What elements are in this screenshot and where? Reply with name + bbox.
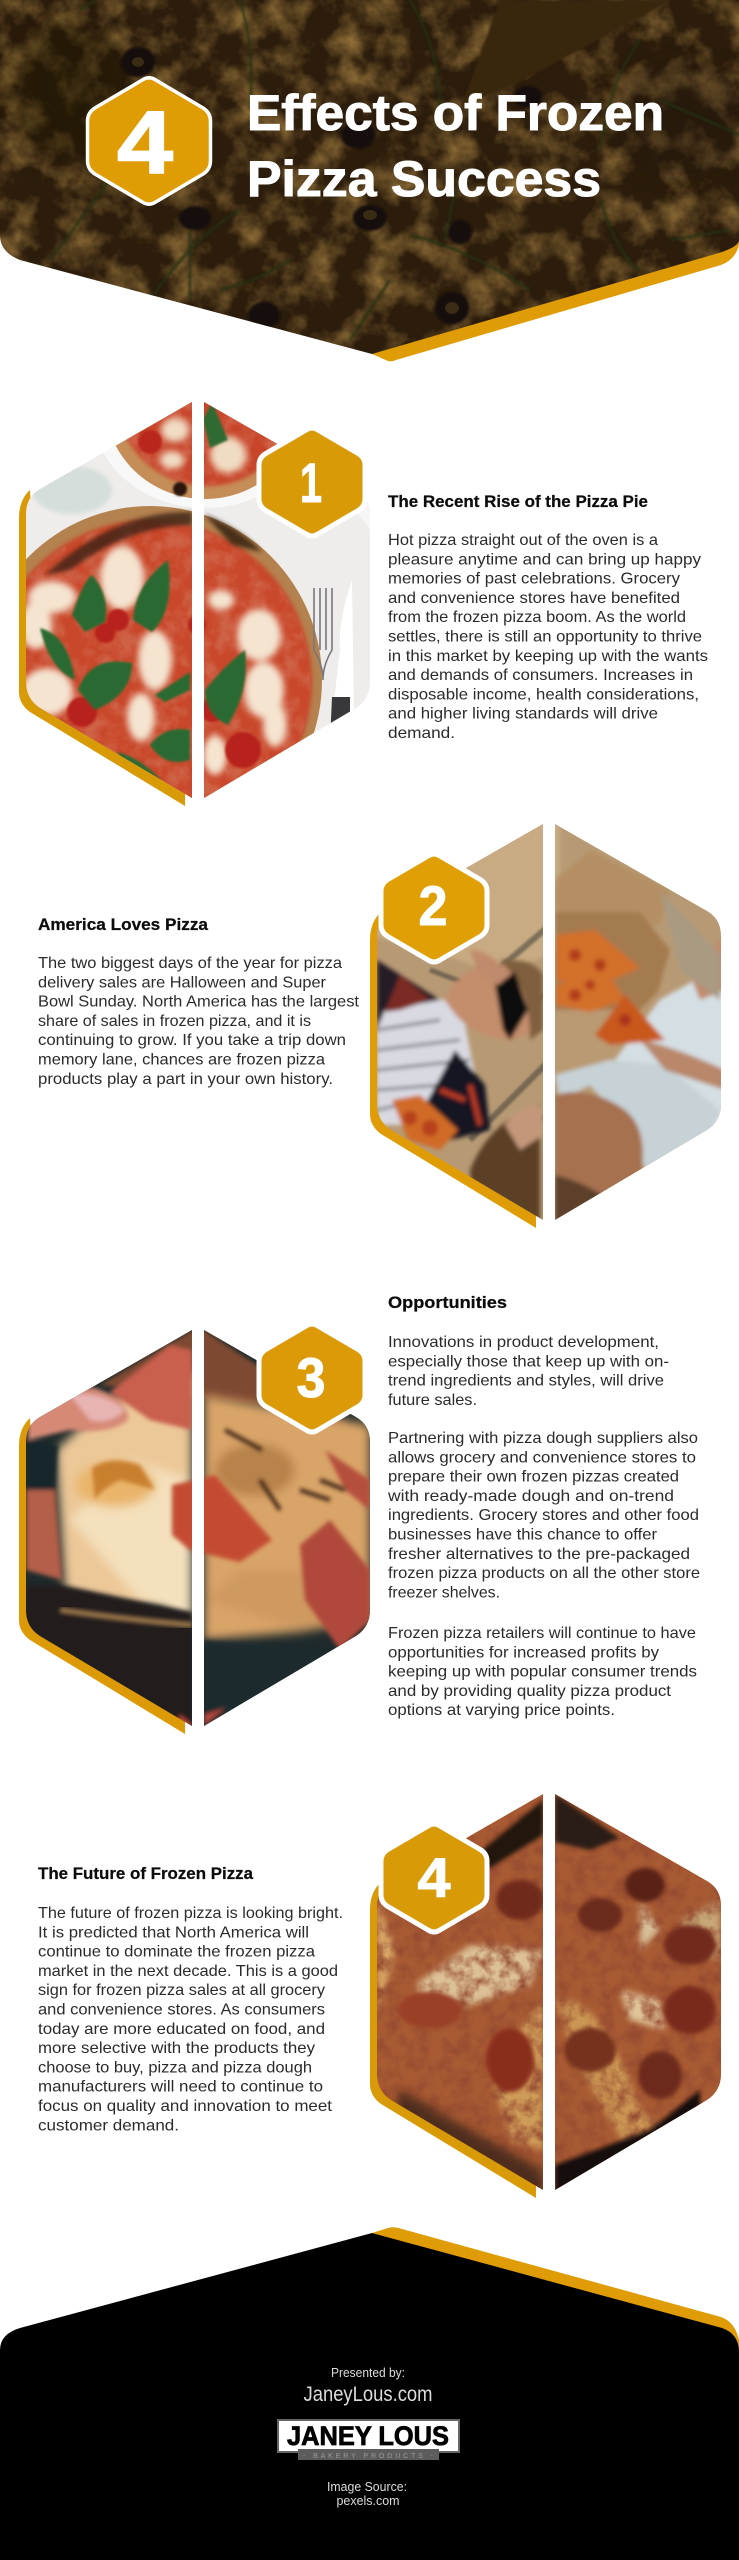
footer orange accent — [372, 2227, 739, 2360]
section 4 body: today are more educated on food, and — [38, 2021, 325, 2038]
section 3 body: Frozen pizza retailers will continue to have — [388, 1625, 696, 1642]
footer — [0, 2227, 739, 2560]
section 3 body: prepare their own frozen pizzas created — [388, 1469, 679, 1486]
section 2 heading: America Loves Pizza — [38, 915, 209, 934]
section 4 body: focus on quality and innovation to meet — [38, 2098, 333, 2115]
logo: Janey Lous Bakery Products: JANEY LOUS — [287, 2421, 449, 2451]
section 3 body: keeping up with popular consumer trends — [388, 1664, 697, 1681]
section 3 body: businesses have this chance to offer — [388, 1526, 658, 1544]
section 4 body: continue to dominate the frozen pizza — [38, 1944, 315, 1961]
section 3 body: future sales. — [388, 1392, 477, 1409]
logo: Janey Lous Bakery Products: - BAKERY PRODUCTS - — [303, 2453, 434, 2460]
image source — [327, 2479, 407, 2508]
section 1 body — [388, 532, 708, 742]
section 1 body: and higher living standards will drive — [388, 706, 658, 723]
section 1 — [19, 402, 708, 806]
section 1 body: Hot pizza straight out of the oven is a — [388, 532, 658, 549]
section 3 body: trend ingredients and styles, will drive — [388, 1373, 664, 1390]
section 4 body: The future of frozen pizza is looking bright. — [38, 1905, 343, 1922]
section 2 body: products play a part in your own history. — [38, 1071, 333, 1088]
section 1 body: pleasure anytime and can bring up happy — [388, 551, 701, 568]
section 3 body: fresher alternatives to the pre-packaged — [388, 1546, 690, 1563]
header number badge: 4 — [117, 92, 174, 192]
section 4 body: sign for frozen pizza sales at all grocery — [38, 1982, 325, 1999]
image source: Image Source: — [327, 2479, 407, 2494]
section 3 body: Partnering with pizza dough suppliers also — [388, 1430, 698, 1447]
section 2 body: continuing to grow. If you take a trip down — [38, 1032, 346, 1049]
section 4 body: It is predicted that North America will — [38, 1924, 309, 1941]
section 3 body: with ready-made dough and on-trend — [387, 1488, 674, 1505]
section 3 body: ingredients. Grocery stores and other food — [388, 1507, 699, 1524]
section 1 number badge — [259, 428, 365, 536]
section 2 body: share of sales in frozen pizza, and it is — [38, 1013, 311, 1030]
section 2 body: Bowl Sunday. North America has the largest — [38, 994, 360, 1011]
section 3 number badge — [259, 1324, 365, 1432]
section 3 body: freezer shelves. — [388, 1584, 500, 1601]
section 4 body: more selective with the products they — [38, 2040, 315, 2057]
section 1 body: settles, there is still an opportunity to thrive — [388, 628, 702, 646]
section 2 number badge: 2 — [418, 874, 448, 937]
section 1 body: memories of past celebrations. Grocery — [388, 571, 680, 588]
section 4 number badge: 4 — [418, 1846, 450, 1909]
section 3 body: and by providing quality pizza product — [388, 1683, 672, 1700]
section 1 number badge: 1 — [300, 451, 322, 514]
section 2 orange accent — [370, 912, 536, 1228]
section 2 photo: couple with pizza on a blanket — [370, 820, 730, 1230]
section 2 body: The two biggest days of the year for pizza — [38, 955, 342, 972]
section 3 — [19, 1293, 700, 1735]
section 3 photo: hand holding a pizza slice — [20, 1325, 380, 1735]
section 4 body: and convenience stores. As consumers — [38, 2002, 325, 2018]
section 2 body: delivery sales are Halloween and Super — [38, 974, 327, 991]
title — [247, 85, 664, 207]
section 2 number badge — [381, 854, 487, 962]
section 4 photo: pepperoni pizza close-up — [370, 1790, 730, 2200]
section 3 body: allows grocery and convenience stores to — [388, 1449, 696, 1466]
section 2 body: memory lane, chances are frozen pizza — [38, 1052, 325, 1068]
section 4 body — [38, 1905, 343, 2134]
section 3 body — [387, 1334, 700, 1719]
header number badge — [88, 78, 210, 204]
section 1 body: disposable income, health considerations, — [388, 686, 699, 703]
image source: pexels.com — [336, 2493, 400, 2508]
section 3 orange accent — [19, 1418, 185, 1734]
section 1 heading: The Recent Rise of the Pizza Pie — [388, 492, 648, 511]
section 4 heading: The Future of Frozen Pizza — [38, 1864, 254, 1883]
section 1 body: from the frozen pizza boom. As the world — [388, 609, 686, 626]
section 2 — [38, 820, 730, 1230]
section 1 body: demand. — [388, 725, 455, 742]
section 1 photo: margherita pizza — [26, 402, 370, 798]
section 4 number badge — [381, 1824, 487, 1932]
section 3 body: frozen pizza products on all the other store — [388, 1565, 700, 1582]
header orange accent — [372, 230, 739, 361]
presented by: JaneyLous.com — [304, 2383, 432, 2406]
title: Pizza Success — [247, 151, 601, 207]
section 3 heading: Opportunities — [388, 1293, 507, 1312]
presented by: Presented by: — [331, 2365, 405, 2380]
section 3 body: options at varying price points. — [388, 1702, 615, 1719]
section 1 orange accent — [19, 490, 185, 806]
section 2 body — [38, 955, 360, 1088]
section 4 body: manufacturers will need to continue to — [38, 2079, 323, 2096]
presented by — [304, 2365, 432, 2406]
title: Effects of Frozen — [247, 85, 664, 141]
footer black panel — [0, 2233, 739, 2560]
section 4 — [38, 1790, 730, 2200]
section 3 number badge: 3 — [296, 1346, 326, 1409]
section 4 body: market in the next decade. This is a good — [38, 1963, 338, 1980]
section 1 body: and demands of consumers. Increases in — [388, 667, 693, 684]
header pizza photo — [0, 0, 739, 360]
header banner — [0, 0, 739, 361]
section 4 body: choose to buy, pizza and pizza dough — [38, 2059, 312, 2076]
section 1 body: in this market by keeping up with the wants — [388, 648, 708, 665]
section 3 body: opportunities for increased profits by — [388, 1644, 659, 1661]
section 4 body: customer demand. — [38, 2117, 179, 2134]
section 3 body: especially those that keep up with on- — [388, 1353, 669, 1370]
section 3 body: Innovations in product development, — [388, 1334, 659, 1351]
section 1 body: and convenience stores have benefited — [388, 590, 680, 607]
section 4 orange accent — [370, 1882, 536, 2198]
